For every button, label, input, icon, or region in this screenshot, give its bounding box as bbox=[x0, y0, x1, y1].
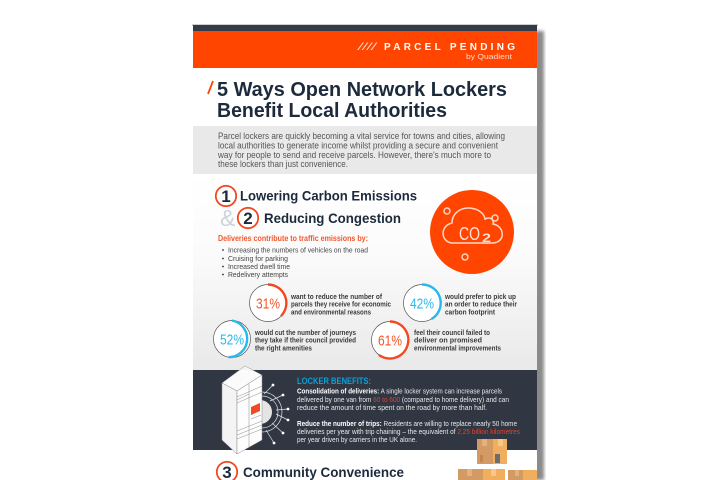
stat: 42%: would prefer to pick up bbox=[444, 294, 516, 301]
stat: 52%: they take if their council provided bbox=[255, 338, 356, 345]
notch marker bbox=[241, 367, 249, 370]
title: 5 Ways Open Network Lockers bbox=[217, 79, 507, 101]
heading 2: reducing congestion: 2 bbox=[243, 209, 253, 228]
title bbox=[208, 79, 507, 122]
locker benefits text: delivered by one van from 60 to 600 (compared to home delivery) and can bbox=[297, 395, 509, 404]
locker benefits text: per year driven by carriers in the UK alone. bbox=[297, 435, 417, 444]
traffic emissions list bbox=[218, 233, 368, 279]
icon: CO2 cloud: CO bbox=[459, 224, 480, 244]
locker benefits text: LOCKER BENEFITS: bbox=[297, 376, 371, 387]
stat: 42%: 42% bbox=[410, 296, 434, 312]
heading 3: community convenience: Community Convenience bbox=[243, 464, 404, 480]
intro text panel bbox=[193, 126, 537, 174]
stat: 52%: 52% bbox=[220, 332, 244, 348]
stat: 52% bbox=[214, 320, 356, 358]
heading 2: reducing congestion bbox=[220, 205, 401, 231]
infographic page bbox=[192, 24, 546, 480]
intro text panel: these lockers than just convenience. bbox=[218, 159, 348, 169]
header banner bbox=[193, 25, 537, 68]
stat: 42%: an order to reduce their bbox=[445, 302, 517, 309]
stat: 61%: environmental improvements bbox=[414, 345, 501, 352]
traffic emissions list: Increasing the numbers of vehicles on the road bbox=[228, 248, 368, 254]
parcel boxes illustration bbox=[458, 439, 537, 480]
heading 2: reducing congestion: Reducing Congestion bbox=[264, 210, 401, 226]
locker benefits text bbox=[297, 376, 520, 444]
stat: 61% bbox=[372, 322, 501, 358]
page drop shadow bbox=[192, 24, 544, 480]
heading 1: lowering carbon emissions: Lowering Carbon Emissions bbox=[240, 188, 417, 204]
title: Benefit Local Authorities bbox=[217, 100, 447, 122]
intro text panel: Parcel lockers are quickly becoming a vital service for towns and cities, allowing bbox=[218, 131, 505, 141]
icon: CO2 cloud bbox=[430, 190, 514, 274]
traffic emissions list: Cruising for parking bbox=[228, 256, 288, 263]
brand logo bbox=[356, 42, 515, 61]
brand logo: PARCEL PENDING bbox=[384, 42, 515, 53]
locker benefits text: Consolidation of deliveries: A single locker system can increase parcels bbox=[297, 386, 502, 396]
stat: 52%: the right amenities bbox=[255, 345, 312, 352]
stat: 52%: would cut the number of journeys bbox=[254, 330, 356, 337]
traffic emissions list: Deliveries contribute to traffic emissions by: bbox=[218, 233, 368, 243]
stat: 31%: parcels they receive for economic bbox=[291, 302, 391, 309]
stat: 42% bbox=[404, 284, 517, 322]
traffic emissions list: Redelivery attempts bbox=[228, 272, 288, 279]
stat: 61%: 61% bbox=[378, 332, 402, 350]
stat: 31%: and environmental reasons bbox=[291, 309, 371, 316]
document sheet bbox=[193, 25, 537, 480]
brand logo: by Quadient bbox=[466, 52, 513, 61]
brand logo: //// bbox=[356, 42, 378, 53]
traffic emissions list: Increased dwell time bbox=[228, 264, 290, 271]
intro text panel: way for people to send and receive parcels. However, there's much more to bbox=[217, 150, 491, 160]
locker benefits text: reduce the amount of time spent on the road by more than half. bbox=[297, 403, 487, 412]
locker benefits text: Reduce the number of trips: Residents are willing to replace nearly 50 home bbox=[297, 419, 517, 428]
heading 1: lowering carbon emissions bbox=[216, 186, 417, 206]
locker benefits text: deliveries per year with trip chaining – the equivalent of 2.25 billion kilometres bbox=[297, 427, 520, 436]
intro text panel: local authorities to generate income whilst providing a secure and convenient bbox=[218, 140, 498, 150]
stat: 31%: want to reduce the number of bbox=[290, 294, 383, 301]
panel: locker benefits bbox=[193, 366, 537, 454]
stat: 61%: feel their council failed to bbox=[414, 330, 490, 337]
stat: 31%: 31% bbox=[256, 296, 280, 312]
stat: 31% bbox=[250, 284, 391, 322]
icon: locker signal rays bbox=[260, 384, 289, 444]
heading 1: lowering carbon emissions: 1 bbox=[221, 187, 231, 206]
icon: CO2 cloud: 2 bbox=[482, 231, 491, 245]
stat: 42%: carbon footprint bbox=[445, 309, 496, 316]
section background bbox=[193, 174, 537, 370]
stat: 61%: deliver on promised bbox=[414, 338, 482, 345]
icon: parcel locker bbox=[222, 366, 262, 454]
heading 2: reducing congestion: & bbox=[220, 205, 235, 231]
